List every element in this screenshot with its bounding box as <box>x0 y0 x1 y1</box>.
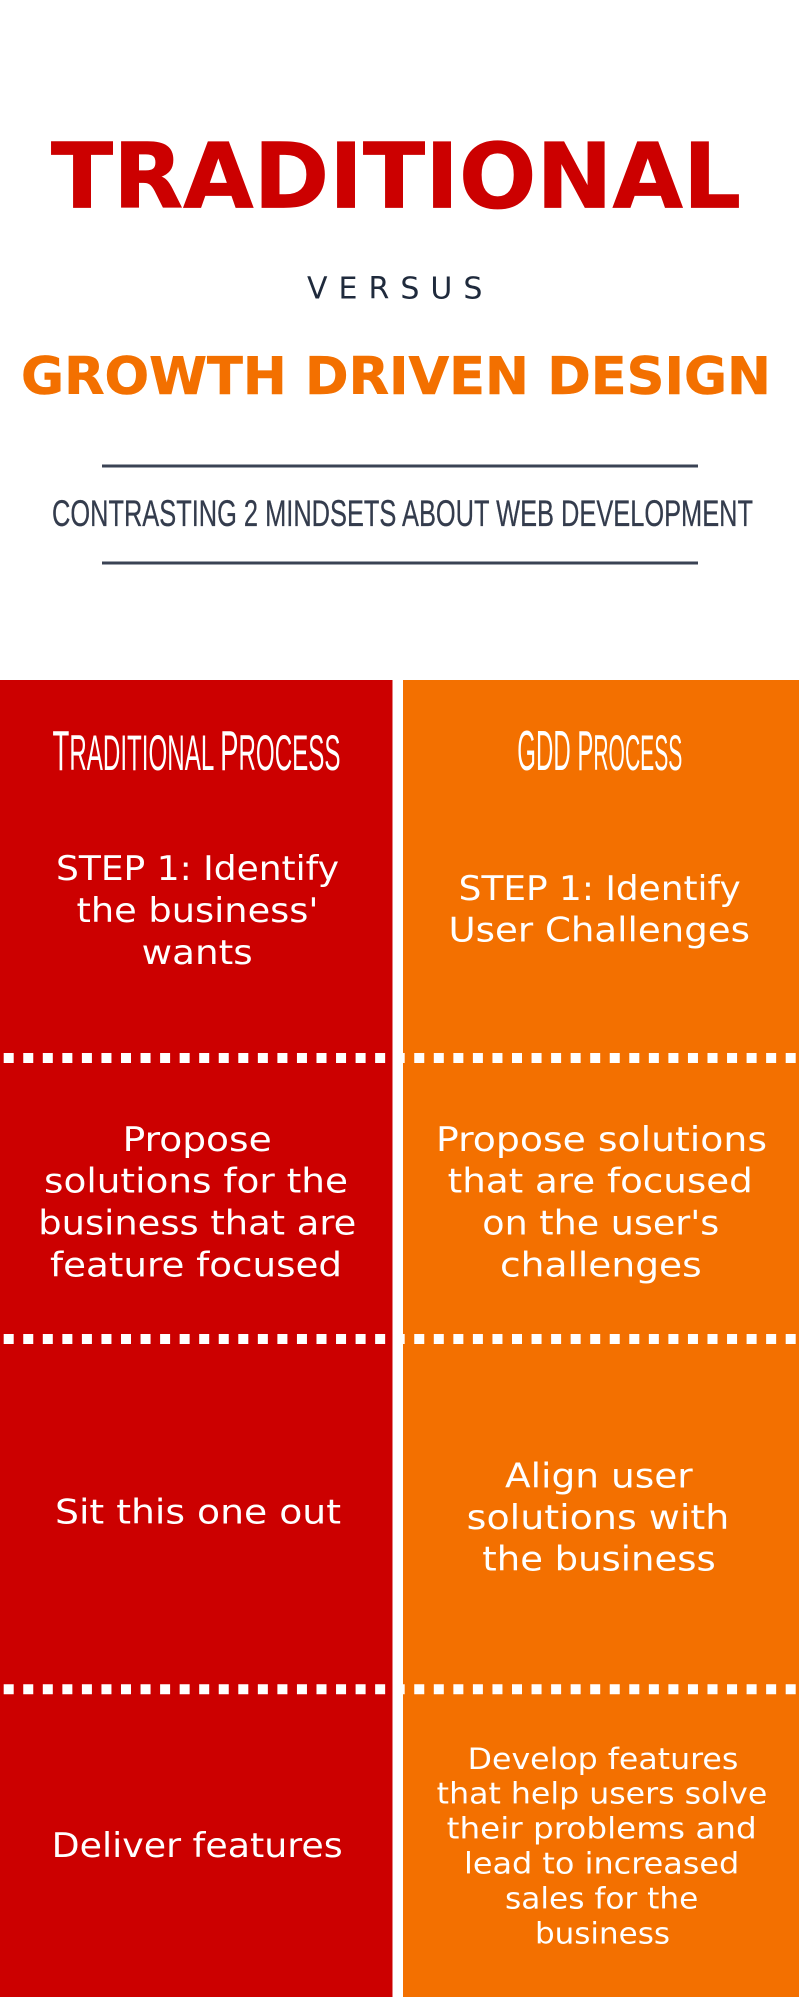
step 1: gdd: STEP 1: Identify <box>459 869 741 909</box>
step 3: gdd: Align user <box>505 1456 693 1496</box>
step 4: gdd: business <box>535 1916 670 1950</box>
heading: gdd process: GDD PROCESS <box>517 719 682 783</box>
step 3: gdd: solutions with <box>467 1498 729 1538</box>
step 2: traditional: business that are <box>38 1204 356 1244</box>
title block <box>21 124 771 407</box>
step 4: gdd <box>437 1742 767 1950</box>
step 4: gdd: Develop features <box>468 1742 738 1776</box>
heading: traditional process: TRADITIONAL PROCESS <box>52 719 340 783</box>
step 2: gdd: challenges <box>500 1246 702 1286</box>
step 2: gdd: on the user's <box>482 1204 719 1244</box>
step 3: traditional: Sit this one out <box>55 1492 341 1532</box>
panel: gdd process column <box>403 680 799 1997</box>
subtitle with rules <box>52 464 753 564</box>
step 2: gdd: Propose solutions <box>436 1120 767 1160</box>
step 1: gdd <box>448 869 750 951</box>
step 2: traditional <box>38 1120 356 1286</box>
step 4: gdd: that help users solve <box>437 1776 767 1810</box>
step 4: gdd: sales for the <box>505 1881 698 1915</box>
step 2: gdd <box>436 1120 767 1286</box>
step 2: traditional: solutions for the <box>44 1162 348 1202</box>
step 2: traditional: Propose <box>123 1120 272 1160</box>
step 1: traditional: STEP 1: Identify <box>56 849 339 889</box>
step 1: gdd: User Challenges <box>448 911 750 951</box>
step 1: traditional: wants <box>142 933 253 973</box>
versus label: VERSUS <box>307 272 493 306</box>
panel: traditional process column <box>0 680 392 1997</box>
step 3: gdd: the business <box>482 1540 716 1580</box>
step 3: gdd <box>467 1456 729 1580</box>
step 4: traditional: Deliver features <box>52 1826 343 1866</box>
step 2: gdd: that are focused <box>448 1162 753 1202</box>
title: traditional: TRADITIONAL <box>51 124 741 230</box>
step 4: gdd: their problems and <box>447 1811 757 1845</box>
step 1: traditional <box>56 849 339 973</box>
title: growth driven design: GROWTH DRIVEN DESIGN <box>21 347 771 407</box>
step 4: gdd: lead to increased <box>464 1846 739 1880</box>
step 2: traditional: feature focused <box>50 1246 342 1286</box>
step 1: traditional: the business' <box>76 891 318 931</box>
